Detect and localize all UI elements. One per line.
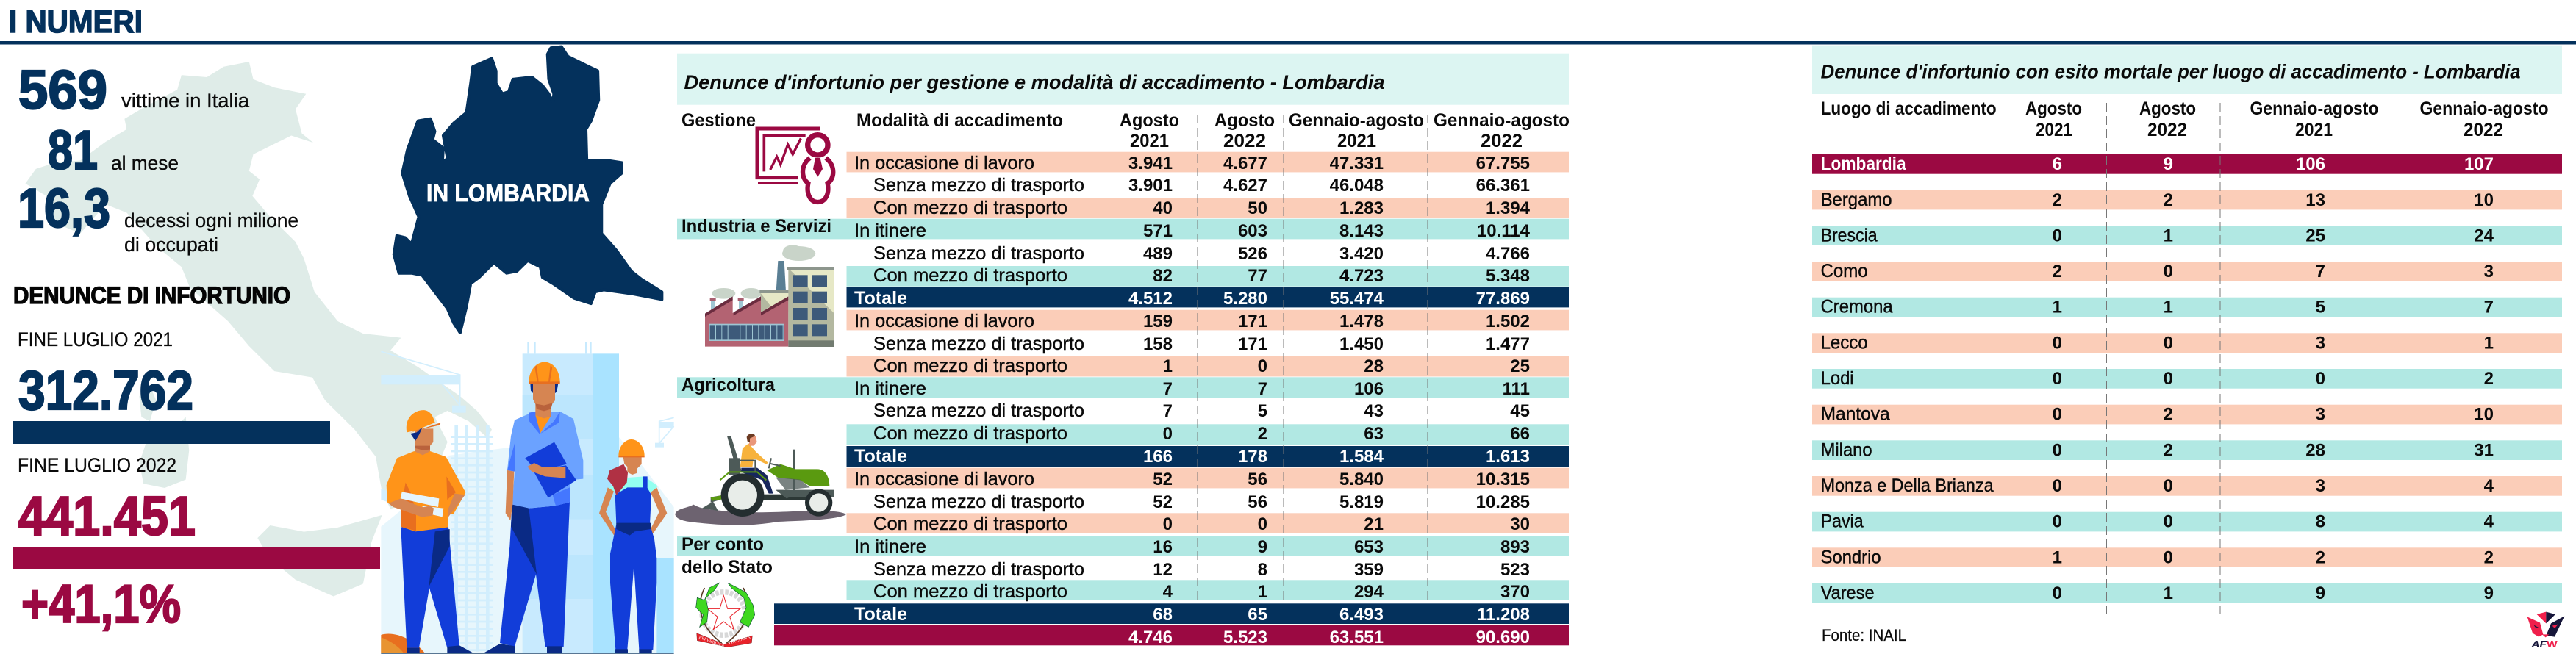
row: Lecco: 1 [2484,333,2494,353]
row: 16 [1153,537,1173,557]
row: 571 [1143,221,1173,241]
row: Senza mezzo di trasporto [873,243,1084,264]
row: 2 [1258,424,1267,444]
logo: AFW: AF [2530,639,2547,650]
illustration: construction workers [381,342,674,654]
row: Milano: 0 [2053,440,2062,460]
row: 1.502 [1486,312,1530,331]
row: 50 [1248,198,1267,218]
row: Varese: 1 [2164,583,2173,603]
row: 4.723 [1339,266,1384,286]
row: grand total: 63.551 [1330,628,1384,647]
table column headers: Agosto [2025,98,2082,119]
row: 10.114 [1477,221,1531,241]
panel: national figures [18,59,298,256]
row: 1 [1163,356,1173,376]
icon: emblem of the Italian Republic: REPVBBLICA [698,636,726,649]
figure: 81 per month: 81 [48,119,98,181]
title: I NUMERI [9,4,143,40]
source note: Fonte: INAIL [1822,626,1906,644]
map of Lombardy [394,47,662,333]
row: 7 [1163,401,1173,421]
row: 0 [1258,514,1267,534]
row: Como: 7 [2316,262,2325,281]
row: Brescia: 25 [2305,226,2325,245]
row: 0 [1163,424,1173,444]
row: 3.420 [1339,244,1384,264]
row: 1.283 [1339,198,1384,218]
row: totale agricoltura [847,446,1569,467]
icon: tractor [675,434,846,525]
row [873,559,1530,580]
row: 45 [1510,401,1530,421]
group heading: Per conto dello Stato: dello Stato [681,557,773,578]
logo: AFW: W [2547,639,2558,650]
row: In itinere [854,536,926,557]
row: Lodi: 2 [2484,369,2494,389]
table column headers: 2021 [1337,131,1376,151]
row: Mantova: 2 [2164,405,2173,425]
row: Brescia: 24 [2474,226,2494,245]
figure: 569 victims: 569 [18,59,107,121]
row: 43 [1364,401,1384,421]
row: Con mezzo di trasporto [873,514,1067,534]
figure: 16,3 deaths per million: 16,3 [18,177,110,239]
row [847,198,1569,218]
table column headers [1821,98,2548,140]
group heading: Agricoltura [677,375,846,398]
row: Bergamo: 13 [2305,190,2325,210]
row: Lombardia [1812,154,2562,174]
row [873,175,1530,195]
row: Varese: 9 [2316,583,2325,603]
row: Brescia: Brescia [1821,225,1878,245]
row: 1.478 [1339,312,1384,331]
table column headers: Modalità di accadimento [856,110,1063,131]
row: totale stato: 11.208 [1477,605,1530,625]
row: Con mezzo di trasporto [873,581,1067,602]
row: Bergamo: 2 [2164,190,2173,210]
row: 603 [1238,221,1267,241]
bar: fine luglio 2022: FINE LUGLIO 2022 [18,454,176,476]
row: Lodi: 0 [2053,369,2062,389]
row [847,468,1569,489]
row [847,580,1569,602]
row: Cremona: 1 [2164,298,2173,317]
row: Senza mezzo di trasporto [873,559,1084,580]
row: totale stato: Totale [854,604,907,625]
table column headers: Gennaio-agosto [2250,98,2379,119]
row: Bergamo: Bergamo [1821,190,1892,210]
row: Varese: 0 [2053,583,2062,603]
worker: tall man [483,362,583,653]
row: grand total [774,625,1569,647]
row: 370 [1500,582,1530,602]
row: grand total: 90.690 [1476,628,1530,647]
row [847,513,1569,534]
row: Brescia [1812,225,2562,245]
table title: Denunce d'infortunio con esito mortale per luogo di accadimento - Lombardia [1821,60,2521,82]
row: Lecco: 0 [2053,333,2062,353]
row: 489 [1143,244,1173,264]
row: Milano: 28 [2305,440,2325,460]
row: 25 [1510,356,1530,376]
row: Sondrio [1812,547,2562,567]
bar: fine luglio 2021: 312.762 [18,359,193,421]
row [847,265,1569,287]
table title [677,54,1569,105]
bar: fine luglio 2022 [13,454,380,569]
row: Lodi [1812,368,2562,389]
row: 8.143 [1339,221,1384,241]
row: Monza e Della Brianza: 0 [2053,476,2062,496]
panel: table by management and mode [677,54,1570,647]
row: Milano [1812,439,2562,460]
row [847,310,1569,331]
table column headers: Gennaio-agosto [1289,110,1424,131]
row: Lombardia: 107 [2464,154,2494,174]
dashed column separators [2107,103,2400,616]
row: 77 [1248,266,1267,286]
row: 359 [1354,560,1384,580]
row: 653 [1354,537,1384,557]
row: 294 [1354,582,1384,602]
row: 56 [1248,492,1267,512]
row: Como: 0 [2164,262,2173,281]
map of Italy background [25,62,492,597]
row: totale agricoltura: 178 [1238,447,1267,467]
row: 28 [1364,356,1384,376]
row: 526 [1238,244,1267,264]
header rule [0,41,2576,44]
row: Lodi: 0 [2164,369,2173,389]
row: 106 [1354,379,1384,399]
row [873,243,1530,264]
row: Varese: 9 [2484,583,2494,603]
row: 5 [1258,401,1267,421]
row: totale agricoltura: 166 [1143,447,1173,467]
row: 56 [1248,470,1267,489]
row: Senza mezzo di trasporto [873,492,1084,512]
row: 5.819 [1339,492,1384,512]
row [873,400,1530,421]
row: Pavia [1812,511,2562,532]
row: 66.361 [1476,176,1530,195]
row: Como: 3 [2484,262,2494,281]
row: 3.901 [1128,176,1173,195]
panel: fatal accidents table [1812,46,2562,644]
row: Varese [1812,583,2562,603]
row: 158 [1143,334,1173,354]
row: Mantova: 10 [2474,405,2494,425]
row: 4.766 [1486,244,1530,264]
group heading: Per conto dello Stato [677,534,846,578]
table column headers: Gennaio-agosto [2420,98,2548,119]
row: totale industria: 77.869 [1476,289,1530,309]
row: 30 [1510,514,1530,534]
row: 893 [1500,537,1530,557]
row: In itinere [854,378,926,399]
bar: fine luglio 2021 [13,328,330,444]
row: Pavia: 4 [2484,512,2494,532]
map of Lombardy: IN LOMBARDIA [426,179,590,206]
logo: AFW [2527,612,2564,650]
row: Con mezzo di trasporto [873,423,1067,444]
row: totale stato: 6.493 [1339,605,1384,625]
row: Milano: Milano [1821,439,1872,460]
row: totale industria [847,287,1569,309]
row: Senza mezzo di trasporto [873,175,1084,195]
row: In occasione di lavoro [854,469,1034,489]
row: Monza e Della Brianza: 0 [2164,476,2173,496]
bar: fine luglio 2022: 441.451 [18,485,196,547]
row: 8 [1258,560,1267,580]
row: 0 [1163,514,1173,534]
increase percentage: +41,1% [21,575,181,634]
row: 1.394 [1486,198,1531,218]
row: Con mezzo di trasporto [873,265,1067,286]
row: Monza e Della Brianza: 3 [2316,476,2325,496]
row: Milano: 2 [2164,440,2173,460]
group heading: Industria e Servizi: Industria e Servizi [681,216,831,237]
row: 4.627 [1223,176,1267,195]
row: 9 [1258,537,1267,557]
table column headers: 2021 [2295,120,2333,140]
row: Lombardia: 106 [2296,154,2325,174]
figure: 81 per month [48,119,179,181]
row: 5.348 [1486,266,1530,286]
row: 63 [1364,424,1384,444]
row: Lecco: Lecco [1821,332,1868,353]
row: Como: Como [1821,261,1868,281]
row: Cremona: Cremona [1821,297,1893,317]
row: totale industria: 5.280 [1223,289,1267,309]
row: Cremona: 5 [2316,298,2325,317]
row [847,356,1569,376]
row: Bergamo: 2 [2053,190,2062,210]
row: Mantova [1812,404,2562,425]
dashed column separators [1198,115,1428,603]
row: Monza e Della Brianza: 4 [2484,476,2494,496]
row: Como [1812,261,2562,281]
row: Lodi: Lodi [1821,368,1854,389]
row: Lecco [1812,332,2562,353]
row: 47.331 [1330,154,1384,173]
row: Con mezzo di trasporto [873,198,1067,218]
row: Pavia: 0 [2053,512,2062,532]
row: 523 [1500,560,1530,580]
row: Bergamo: 10 [2474,190,2494,210]
row: 1.477 [1486,334,1530,354]
table column headers: Agosto [1214,110,1275,131]
row: Bergamo [1812,190,2562,210]
row: totale agricoltura: Totale [854,446,907,467]
row: 52 [1153,470,1173,489]
row: 7 [1163,379,1173,399]
table title: Denunce d'infortunio per gestione e modalità di accadimento - Lombardia [684,71,1385,93]
row: 3.941 [1128,154,1173,173]
row: Milano: 31 [2474,440,2494,460]
row: Lodi: 0 [2316,369,2325,389]
row: 10.315 [1476,470,1530,489]
row: totale industria: Totale [854,288,907,309]
row: totale industria: 4.512 [1128,289,1173,309]
group heading: Agricoltura: Agricoltura [681,375,776,395]
row: 159 [1143,312,1173,331]
row: Brescia: 1 [2164,226,2173,245]
icon: emblem of the Italian Republic: ITALIANA [729,635,752,646]
row: Lecco: 3 [2316,333,2325,353]
row [846,219,1569,241]
table column headers [681,110,1570,151]
icon: presenter with chart [757,129,833,202]
row: 7 [1258,379,1267,399]
row: Pavia: Pavia [1821,511,1864,532]
row: Lombardia: 6 [2053,154,2062,174]
row: 52 [1153,492,1173,512]
table column headers: 2022 [1481,131,1523,151]
row: totale stato [774,603,1569,625]
group heading: Per conto dello Stato: Per conto [681,534,764,555]
row: In itinere [854,220,926,241]
row: 46.048 [1330,176,1384,195]
row: totale agricoltura: 1.584 [1339,447,1384,467]
row [847,152,1569,173]
row: 4.677 [1223,154,1267,173]
row: Lecco: 0 [2164,333,2173,353]
row: 5.840 [1339,470,1384,489]
icon: factory [705,245,834,347]
row: totale agricoltura: 1.613 [1486,447,1530,467]
row: 40 [1153,198,1173,218]
figure: 16,3 deaths per million: di occupati [124,234,218,256]
icon: emblem of the Italian Republic [696,583,755,649]
row: grand total: 4.746 [1128,628,1173,647]
row: 21 [1364,514,1384,534]
row: 82 [1153,266,1173,286]
row: Pavia: 8 [2316,512,2325,532]
figure: 569 victims [18,59,250,121]
row [846,377,1569,399]
figure: 16,3 deaths per million [18,177,298,256]
row [873,492,1530,512]
row: Sondrio: 0 [2164,547,2173,567]
row: 67.755 [1476,154,1530,173]
table column headers: 2022 [2147,120,2187,140]
row: 171 [1238,334,1267,354]
row: Mantova: 3 [2316,405,2325,425]
row: 1.450 [1339,334,1384,354]
row: Varese: Varese [1821,583,1875,603]
row: Sondrio: 2 [2316,547,2325,567]
row: Pavia: 0 [2164,512,2173,532]
row: 111 [1503,379,1530,399]
row: 12 [1153,560,1173,580]
row: Monza e Della Brianza: Monza e Della Brianza [1821,475,1994,496]
row: Sondrio: Sondrio [1821,547,1881,567]
table column headers: Agosto [2139,98,2196,119]
row: 1 [1258,582,1267,602]
row: 10.285 [1476,492,1530,512]
table column headers: 2021 [1130,131,1169,151]
table column headers: Gennaio-agosto [1434,110,1570,131]
row: Brescia: 0 [2053,226,2062,245]
row: Cremona: 1 [2053,298,2062,317]
row: 66 [1510,424,1530,444]
row [873,334,1530,354]
row: totale stato: 65 [1248,605,1267,625]
row: Senza mezzo di trasporto [873,400,1084,421]
table column headers: 2022 [2464,120,2503,140]
worker: woman [599,439,667,653]
row: Sondrio: 2 [2484,547,2494,567]
table column headers: 2021 [2036,120,2072,140]
row: 0 [1258,356,1267,376]
row: grand total: 5.523 [1223,628,1267,647]
row: Monza e Della Brianza [1812,475,2562,496]
row: totale industria: 55.474 [1330,289,1384,309]
table column headers: 2022 [1223,131,1266,151]
row: Cremona: 7 [2484,298,2494,317]
bar: fine luglio 2021: FINE LUGLIO 2021 [18,328,173,351]
row: 171 [1238,312,1267,331]
row: In occasione di lavoro [854,153,1034,173]
row: 4 [1163,582,1173,602]
table column headers: Luogo di accadimento [1821,98,1997,119]
row: Lombardia: Lombardia [1821,154,1907,174]
row: Sondrio: 1 [2053,547,2062,567]
heading: denunce di infortunio: DENUNCE DI INFORTUNIO [13,282,290,309]
row [846,536,1569,557]
row: Como: 2 [2053,262,2062,281]
figure: 81 per month: al mese [111,152,179,174]
row: Cremona [1812,297,2562,317]
table column headers: Agosto [1120,110,1179,131]
row: Lombardia: 9 [2164,154,2173,174]
row: Mantova: Mantova [1821,404,1890,425]
row [847,423,1569,445]
row: Senza mezzo di trasporto [873,334,1084,354]
row: Mantova: 0 [2053,405,2062,425]
row: In occasione di lavoro [854,311,1034,331]
row: Con mezzo di trasporto [873,356,1067,376]
table title [1812,46,2562,94]
table column headers: Gestione [681,110,756,131]
figure: 569 victims: vittime in Italia [121,90,250,112]
worker: left man [387,410,474,653]
row: totale stato: 68 [1153,605,1173,625]
figure: 16,3 deaths per million: decessi ogni milione [124,209,298,231]
